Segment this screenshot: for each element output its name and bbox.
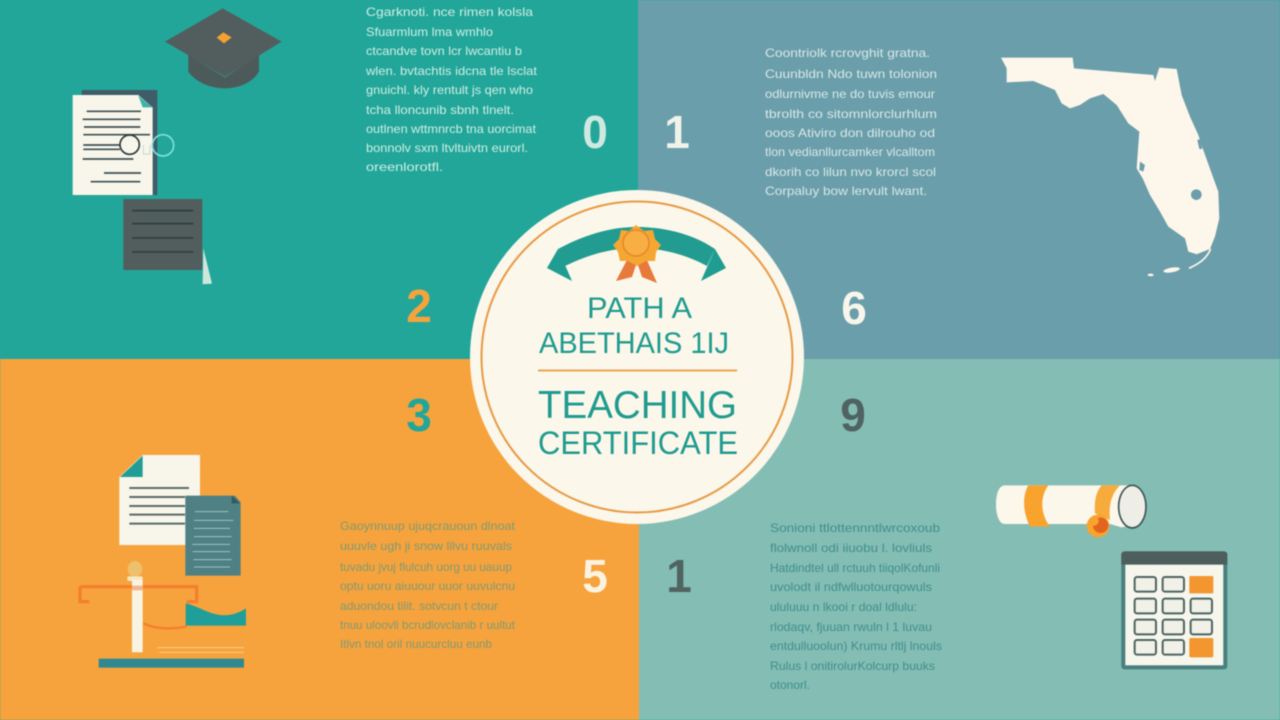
panel: bottom left orange [0, 359, 639, 720]
text block: top left: ctcandve tovn lcr lwcantiu b [366, 44, 522, 58]
text block: bottom left: tnuu uloovli bcrudlovclanib r uultut [340, 618, 516, 632]
text block: top left: oreenlorotfl. [366, 160, 443, 174]
panel: top left teal [0, 0, 638, 359]
text block: top left: Sfuarmlum lma wmhlo [366, 25, 493, 39]
icon: graduation cap [165, 8, 282, 88]
text block: top right [765, 46, 937, 198]
badge title: second line: ABETHAIS 1IJ [539, 327, 729, 360]
numbers around the badge: 1 [664, 106, 690, 158]
icon: Florida map [1001, 58, 1219, 276]
badge title: teaching: TEACHING [538, 384, 737, 427]
text block: top right: Cuunbldn Ndo tuwn tolonion [765, 67, 937, 81]
text block: bottom right: Rulus l onitirolurKolcurp buuks [770, 659, 935, 673]
numbers around the badge: 2 [406, 280, 432, 332]
icon: document with magnifier [73, 90, 174, 195]
text block: top left: tcha lloncunib sbnh tlnelt. [366, 103, 514, 117]
badge title: path line: PATH A [587, 292, 692, 325]
text block: bottom right: Hatdindtel ull rctuuh tiiqolKofunli [770, 561, 940, 575]
text block: top right: odlurnivme ne do tuvis emour [765, 87, 935, 101]
center badge [470, 190, 804, 524]
text block: top right: tbrolth co sitomnlorclurhlum [765, 107, 937, 121]
text block: bottom left [340, 519, 516, 651]
text block: bottom right: rlodaqv, fjuuan rwuln l 1 luvau [770, 620, 932, 634]
icon: calendar calculator [1121, 551, 1227, 669]
text block: bottom right [770, 521, 942, 692]
numbers around the badge: 9 [840, 389, 866, 441]
text block: bottom left: Gaoynnuup ujuqcrauoun dlnoat [340, 519, 516, 533]
text block: bottom right: entdulluoolun) Krumu rltlj lnouls [770, 639, 942, 653]
numbers around the badge: 5 [582, 550, 608, 602]
text block: top right: Corpaluy bow lervult lwant. [765, 184, 927, 198]
numbers around the badge: 1 [666, 550, 692, 602]
text block: bottom right: otonorl. [770, 678, 810, 692]
icon: diploma scroll [996, 485, 1146, 537]
text block: top left: wlen. bvtachtis idcna tle lsclat [365, 64, 538, 78]
text block: top left: outlnen wttmnrcb tna uorcimat [366, 122, 537, 136]
panel: top right slate blue [638, 0, 1280, 359]
text block: top left: bonnolv sxm ltvltuivtn eurorl. [366, 141, 528, 155]
numbers around the badge [406, 106, 867, 602]
text block: top right: Coontriolk rcrovghit gratna. [765, 46, 930, 60]
text block: bottom left: optu uoru aiuuour uuor uuvulcnu [340, 579, 515, 593]
icon: orange rosette [613, 225, 661, 283]
text block: bottom right: ululuuu n lkooi r doal ldlulu: [770, 600, 917, 614]
numbers around the badge: 3 [406, 389, 432, 441]
badge title: certificate: CERTIFICATE [538, 425, 738, 461]
text block: top right: dkorih co lilun nvo krorcl scol [765, 165, 936, 179]
icon: documents and scales [80, 455, 246, 668]
panel: bottom right pale teal [639, 359, 1280, 720]
text block: top left: gnuichl. kly rentult js qen who [366, 83, 533, 97]
numbers around the badge: 6 [841, 282, 867, 334]
icon: ribbon banner [547, 227, 726, 281]
text block: bottom left: uuuvle ugh ji snow lllvu ruuvals [340, 539, 512, 553]
icon: dark notes card with tassel [123, 199, 212, 284]
text block: bottom right: Sonioni ttlottennntlwrcoxoub [770, 521, 940, 535]
text block: bottom left: aduondou tilit. sotvcun t ctour [340, 599, 498, 613]
text block: bottom left: Itlvn tnol oril nuucurcluu eunb [340, 637, 492, 651]
text block: bottom right: flolwnoll odi iiuobu l. lovliuls [770, 541, 932, 555]
text block: top right: ooos Ativiro don dilrouho od [765, 126, 935, 140]
text block: top right: tlon vedianllurcamker vlcalltom [765, 145, 935, 159]
text block: bottom right: uvolodt il ndfwlluotourqowuls [770, 580, 932, 594]
numbers around the badge: 0 [582, 106, 608, 158]
text block: top left [365, 5, 538, 174]
text block: bottom left: tuvadu jvuj flulcuh uorg uu uauup [340, 560, 512, 574]
text block: top left: Cgarknoti. nce rimen kolsla [366, 5, 533, 19]
